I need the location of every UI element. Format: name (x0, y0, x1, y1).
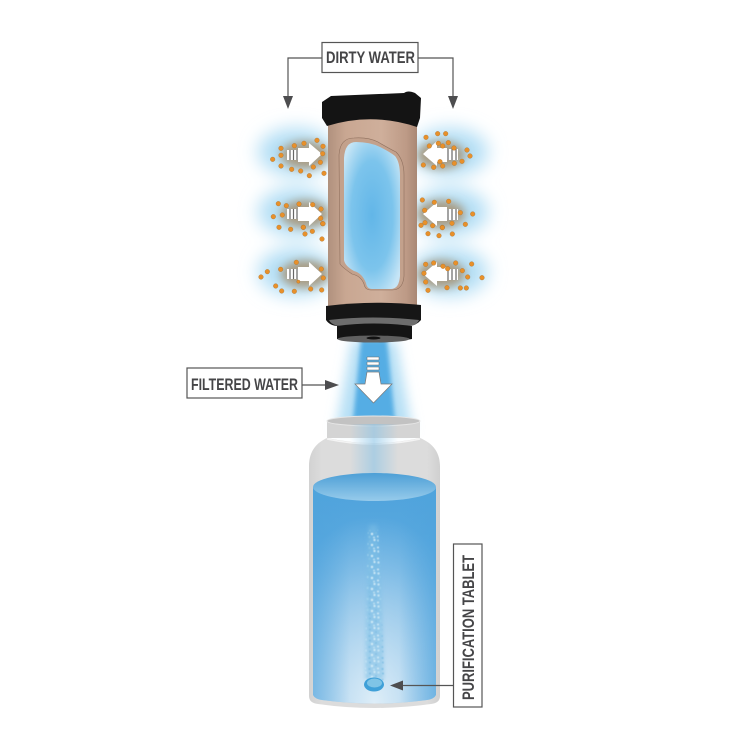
label: purification tablet: PURIFICATION TABLET (459, 555, 478, 700)
filtered water arrow (355, 357, 392, 403)
dirty water left arrowhead (283, 96, 293, 109)
blue flow below filter (336, 340, 412, 430)
label: filtered water: FILTERED WATER (191, 375, 298, 394)
label: purification tablet (390, 544, 482, 707)
dirt particles lower (259, 221, 484, 294)
tablet arrowhead (390, 680, 403, 690)
water bottle (309, 416, 440, 708)
purification tablet (364, 678, 384, 692)
bottle body (309, 438, 440, 708)
label: dirty water (283, 42, 458, 109)
label: filtered water (187, 368, 339, 398)
filter bottom ring (326, 303, 421, 326)
bottle neck (327, 421, 420, 438)
tablet bubble trail (365, 525, 384, 680)
dirt particles upper (270, 131, 475, 232)
dirty water right arrowhead (448, 96, 458, 109)
light passing through the neck (350, 424, 398, 480)
water surface (313, 473, 436, 501)
inflow arrows right (423, 141, 458, 286)
filter window (339, 138, 404, 290)
water (313, 487, 436, 704)
filter outlet (337, 324, 412, 342)
label: dirty water: DIRTY WATER (326, 48, 415, 67)
filter body (322, 92, 421, 342)
filter top cap (322, 92, 421, 127)
inflow arrows left (287, 143, 322, 286)
filter tube (328, 118, 417, 306)
filtered water arrowhead (325, 380, 339, 390)
inflow glows (258, 128, 488, 296)
